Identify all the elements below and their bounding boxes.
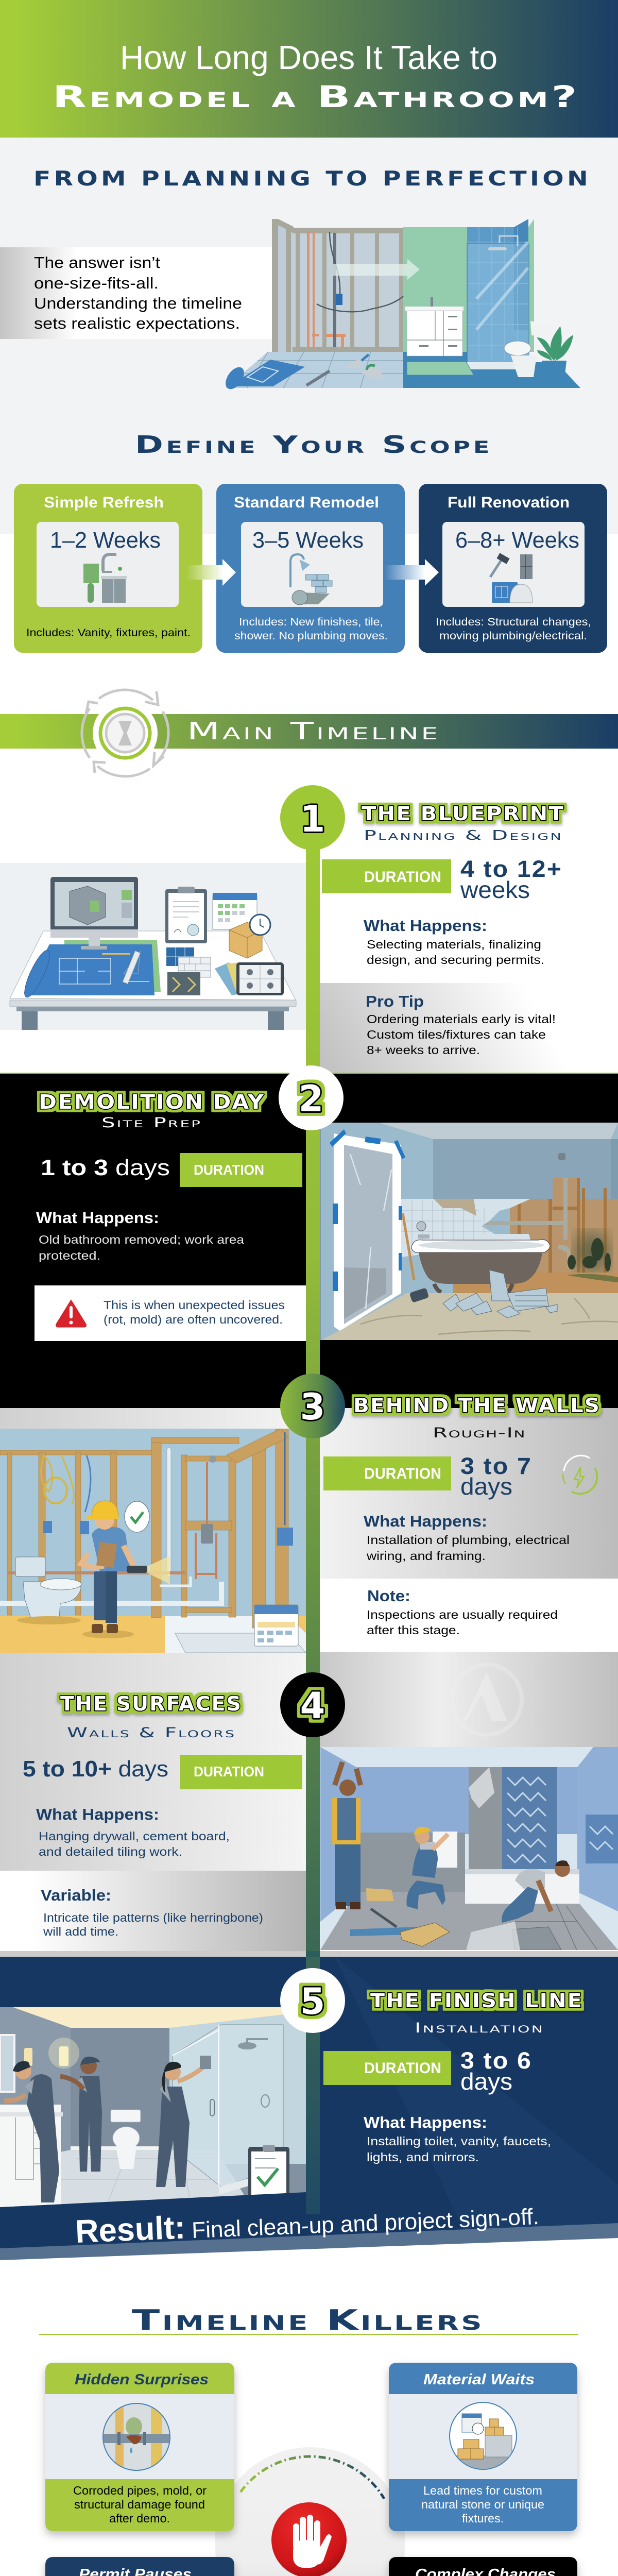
illustration: tiling crew — [320, 1747, 618, 1950]
callout: pro tip — [320, 983, 618, 1073]
text: what happens: What Happens: — [364, 2113, 487, 2131]
card: hidden surprises: Hidden Surprises — [75, 2371, 209, 2388]
subheading: installation: Installation — [415, 2020, 544, 2036]
badge: number 3 — [280, 1374, 345, 1438]
card: simple refresh: Includes: Vanity, fixtures, paint. — [26, 627, 191, 639]
duration value: 4 to 12+ — [460, 856, 562, 882]
duration tag: DURATION — [194, 1162, 264, 1178]
badge: number 4: 4 — [300, 1685, 325, 1727]
card: standard remodel: 3–5 Weeks — [252, 528, 364, 553]
text: what happens — [36, 1805, 230, 1858]
subheading: site prep: Site Prep — [101, 1115, 202, 1131]
card: material waits: Lead times for custom — [423, 2484, 542, 2497]
result statement: Result: Final clean-up and project sign-off. — [75, 2195, 540, 2250]
intro text band: one-size-fits-all. — [34, 274, 159, 292]
card: full renovation: moving plumbing/electrical. — [439, 630, 587, 642]
title line one: How Long Does It Take to — [120, 39, 497, 76]
text: what happens: wiring, and framing. — [366, 1549, 486, 1563]
banner: main timeline: Main Timeline — [187, 717, 440, 745]
icon: calendar, boxes and stone — [449, 2402, 517, 2471]
text: what happens — [36, 1209, 244, 1262]
badge: number 1: 1 — [300, 798, 325, 840]
duration tag — [180, 1755, 302, 1789]
illustration: before and after bathroom — [222, 219, 580, 393]
arrow: transformation — [333, 259, 420, 280]
text: what happens: What Happens: — [364, 1512, 487, 1530]
icon: warning triangle — [56, 1300, 87, 1327]
illustration: finishing crew — [0, 2007, 306, 2210]
heading: the blueprint: THE BLUEPRINT — [362, 803, 564, 825]
heading: behind the walls: BEHIND THE WALLS — [353, 1394, 600, 1417]
intro text band: Understanding the timeline — [34, 294, 242, 312]
card: full renovation: Includes: Structural changes, — [436, 616, 591, 628]
illustration: planning desk — [0, 863, 306, 1030]
illustration: demolished bathroom — [320, 1123, 618, 1341]
duration value: weeks — [460, 876, 530, 903]
text: what happens: Installation of plumbing, electrical — [367, 1533, 570, 1547]
title line two: Remodel a Bathroom? — [53, 79, 580, 114]
icon: hammer, blueprint and hard hat — [490, 553, 533, 603]
banner: main timeline — [0, 690, 618, 776]
intro text band — [0, 247, 273, 339]
card: material waits — [389, 2363, 577, 2531]
heading: from planning to perfection: FROM PLANNING TO PERFECTION — [33, 167, 591, 191]
icon: raised hand — [293, 2515, 332, 2568]
duration tag — [323, 1456, 451, 1490]
callout: note: Inspections are usually required — [367, 1608, 558, 1621]
icon: corroded pipe — [102, 2403, 170, 2471]
card: full renovation: Full Renovation — [448, 494, 570, 511]
icon: shower, tiles and roll — [290, 554, 332, 605]
callout: pro tip: 8+ weeks to arrive. — [367, 1043, 480, 1057]
heading: timeline killers: Timeline Killers — [132, 2304, 484, 2336]
callout: pro tip: Ordering materials early is vital! — [367, 1012, 556, 1026]
subheading: planning and design: Planning & Design — [364, 828, 563, 843]
card: full renovation: 6–8+ Weeks — [455, 528, 579, 553]
text: what happens — [364, 1512, 570, 1563]
duration value — [460, 856, 562, 903]
callout: note — [320, 1579, 618, 1652]
card: simple refresh — [14, 484, 202, 653]
text: what happens — [364, 2113, 551, 2164]
timeline spine — [306, 845, 320, 2215]
callout: note: Note: — [367, 1587, 410, 1605]
panel: intro and scope background — [0, 138, 618, 534]
callout: pro tip: Pro Tip — [366, 992, 424, 1010]
duration tag: DURATION — [194, 1764, 264, 1780]
illustration: rough-in inspection — [0, 1429, 306, 1653]
intro text band: sets realistic expectations. — [34, 314, 240, 332]
arrow: standard to full — [384, 559, 439, 586]
subheading: rough-in: Rough-In — [433, 1425, 526, 1441]
panel: step 3 behind the walls — [0, 1374, 618, 1871]
card: material waits: natural stone or unique — [421, 2498, 544, 2511]
callout: variable — [0, 1871, 306, 1951]
icon: brush, faucet and vanity — [83, 554, 127, 603]
duration value: 5 to 10+ days — [23, 1756, 168, 1782]
duration value: 1 to 3 days — [41, 1155, 170, 1180]
text: what happens: lights, and mirrors. — [367, 2150, 479, 2164]
intro text band: The answer isn’t — [34, 253, 160, 272]
icon: lightning bolt cycle — [563, 1455, 597, 1494]
callout: unexpected issues warning — [35, 1285, 306, 1341]
panel: step 2 demolition day — [0, 1065, 618, 1408]
card: complex changes — [389, 2557, 577, 2576]
card: hidden surprises: after demo. — [109, 2512, 170, 2525]
badge: number 2: 2 — [299, 1078, 323, 1120]
card: standard remodel: Standard Remodel — [234, 494, 379, 511]
panel: step 1 the blueprint — [0, 785, 618, 1073]
heading: the finish line: THE FINISH LINE — [370, 1990, 583, 2012]
text: what happens: Old bathroom removed; work area — [39, 1233, 244, 1246]
card: full renovation — [419, 484, 607, 653]
text: what happens: protected. — [39, 1249, 100, 1262]
text: what happens: Hanging drywall, cement board, — [39, 1829, 230, 1843]
panel: step 4 the surfaces — [0, 1665, 618, 1951]
callout: unexpected issues warning: This is when unexpected issues — [104, 1298, 285, 1312]
badge: number 5: 5 — [300, 1980, 325, 2023]
duration value: days — [460, 2068, 512, 2095]
text: what happens: Selecting materials, finalizing — [367, 938, 541, 951]
header banner — [0, 0, 618, 138]
card: material waits: Material Waits — [423, 2371, 535, 2388]
callout: variable: will add time. — [43, 1925, 118, 1938]
card: standard remodel: Includes: New finishes, tile, — [239, 616, 383, 628]
card: hidden surprises — [45, 2363, 234, 2531]
duration tag: DURATION — [364, 1465, 441, 1482]
duration value — [460, 1453, 532, 1500]
badge: number 1 — [280, 785, 345, 850]
panel: step 5 the finish line — [0, 1957, 618, 2260]
duration tag: DURATION — [364, 869, 441, 886]
text: what happens: Installing toilet, vanity, faucets, — [367, 2134, 551, 2148]
watermark logo — [452, 1665, 522, 1735]
icon: hourglass with cycle arrows — [82, 690, 168, 776]
callout: unexpected issues warning: (rot, mold) are often uncovered. — [104, 1313, 283, 1326]
text: what happens — [364, 917, 544, 967]
badge: number 5 — [280, 1968, 345, 2033]
card: standard remodel: shower. No plumbing moves. — [234, 630, 388, 642]
card: hidden surprises: Corroded pipes, mold, or — [73, 2484, 207, 2497]
card: hidden surprises: structural damage found — [74, 2498, 205, 2511]
badge: number 3: 3 — [300, 1386, 325, 1428]
subheading: walls and floors: Walls & Floors — [67, 1725, 236, 1741]
card: standard remodel — [216, 484, 405, 653]
text: what happens: design, and securing permits. — [367, 953, 544, 967]
card: simple refresh: 1–2 Weeks — [50, 528, 161, 553]
arrow: refresh to standard — [185, 559, 236, 586]
heading: demolition day: DEMOLITION DAY — [39, 1091, 265, 1113]
duration tag — [323, 2051, 451, 2085]
text: what happens: What Happens: — [36, 1209, 159, 1227]
badge: number 4 — [280, 1672, 345, 1737]
duration value: 3 to 7 — [460, 1453, 532, 1479]
text: what happens: What Happens: — [36, 1805, 159, 1823]
callout: variable: Intricate tile patterns (like herringbone) — [43, 1911, 263, 1924]
text: what happens: What Happens: — [364, 917, 487, 935]
duration value: 3 to 6 — [460, 2047, 532, 2074]
heading: define your scope: Define Your Scope — [135, 431, 492, 459]
text: what happens: and detailed tiling work. — [39, 1845, 182, 1858]
duration tag: DURATION — [364, 2060, 441, 2077]
callout: variable: Variable: — [41, 1886, 111, 1904]
card: permit pauses — [45, 2557, 234, 2576]
callout: pro tip: Custom tiles/fixtures can take — [367, 1028, 546, 1041]
duration value — [460, 2047, 532, 2095]
callout: note: after this stage. — [367, 1623, 460, 1637]
badge: number 2 — [279, 1065, 344, 1130]
center stop sign — [215, 2447, 405, 2576]
duration tag — [180, 1153, 302, 1187]
card: simple refresh: Simple Refresh — [44, 494, 164, 511]
duration value: days — [460, 1473, 512, 1500]
duration tag — [322, 859, 451, 893]
heading: the surfaces: THE SURFACES — [60, 1692, 242, 1715]
card: material waits: fixtures. — [462, 2512, 504, 2525]
